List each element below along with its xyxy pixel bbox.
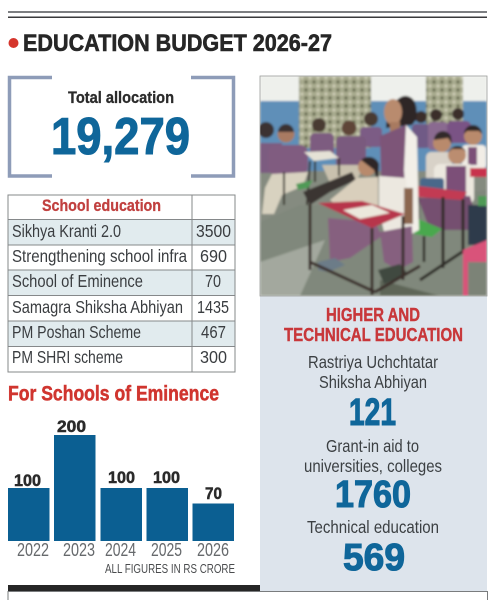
- bar values: 100: [108, 468, 135, 487]
- bar values: 100: [153, 468, 180, 487]
- item label: Rastriya Uchchtatar Shiksha Abhiyan: Rastriya Uchchtatar: [308, 352, 438, 372]
- year labels: 2025: [151, 540, 182, 560]
- panel: higher and technical education: [260, 296, 487, 591]
- bar values: 200: [57, 417, 86, 436]
- item label: technical education: Technical education: [307, 517, 439, 537]
- total allocation value: 19,279: [51, 108, 190, 166]
- year labels: 2026: [197, 540, 229, 560]
- row: PM Poshan Scheme: PM Poshan Scheme: [12, 322, 141, 342]
- item label: grant-in aid: Grant-in aid to: [326, 436, 419, 456]
- row: Samagra Shiksha Abhiyan: Samagra Shiksha Abhiyan: [12, 297, 183, 317]
- right girls: [433, 134, 451, 152]
- year labels: 2022: [17, 540, 49, 560]
- panel: total allocation: [10, 78, 234, 176]
- item label: grant-in aid: universities, colleges: [304, 456, 442, 476]
- bar values: 70: [205, 484, 222, 503]
- year labels: 2023: [63, 540, 95, 560]
- title: EDUCATION BUDGET 2026-27: [23, 30, 332, 57]
- row: Strengthening school infra: Strengthening school infra: [12, 246, 187, 266]
- bottom box outline: [8, 592, 488, 600]
- left boys: [312, 118, 326, 132]
- year labels: [17, 540, 229, 560]
- bracket frame: [10, 78, 234, 176]
- photo border: [260, 76, 487, 296]
- bar values: 100: [14, 471, 41, 490]
- bars: [8, 435, 234, 541]
- year labels: 2024: [105, 540, 136, 560]
- row: PM SHRI scheme: [12, 347, 227, 367]
- row: Sikhya Kranti: Sikhya Kranti 2.0: [12, 221, 121, 241]
- row: Strengthening school infra: 690: [200, 246, 227, 266]
- standing girl: [386, 96, 417, 128]
- table heading: School education: [42, 196, 161, 215]
- header rules: [8, 11, 487, 18]
- table: school education: [8, 195, 235, 372]
- row: Sikhya Kranti: 3500: [196, 221, 231, 241]
- bar chart: schools of eminence: [8, 417, 234, 560]
- back row students: [364, 112, 378, 126]
- panel heading: HIGHER AND: [326, 304, 420, 325]
- value: 121: 121: [349, 392, 396, 434]
- row: PM SHRI scheme: PM SHRI scheme: [12, 347, 123, 367]
- photo: classroom: [258, 76, 487, 296]
- value: 1760: 1760: [335, 474, 411, 516]
- front desk: [318, 201, 405, 228]
- bar values: [14, 417, 222, 503]
- row: School of Eminence: 70: [205, 271, 221, 291]
- bottom divider bar: [8, 585, 260, 591]
- item label: Rastriya Uchchtatar Shiksha Abhiyan: [308, 352, 438, 392]
- unit note: ALL FIGURES IN RS CRORE: [105, 561, 235, 576]
- row: Samagra Shiksha Abhiyan: 1435: [197, 297, 229, 317]
- green seat: [414, 218, 442, 237]
- left desks: [304, 151, 339, 161]
- item label: grant-in aid: [304, 436, 442, 476]
- row: PM SHRI scheme: 300: [200, 347, 227, 367]
- right desk: [418, 186, 467, 200]
- total allocation label: Total allocation: [68, 89, 174, 107]
- item label: Rastriya Uchchtatar Shiksha Abhiyan: Shiksha Abhiyan: [319, 372, 427, 392]
- pink stool: [463, 240, 487, 296]
- front seated girl: [358, 158, 376, 176]
- row: PM Poshan Scheme: 467: [201, 322, 226, 342]
- row: School of Eminence: School of Eminence: [12, 271, 143, 291]
- chart heading: For Schools of Eminence: [8, 382, 219, 406]
- value: 569: 569: [343, 537, 405, 579]
- panel heading: [284, 304, 463, 345]
- row: Sikhya Kranti: [12, 221, 231, 241]
